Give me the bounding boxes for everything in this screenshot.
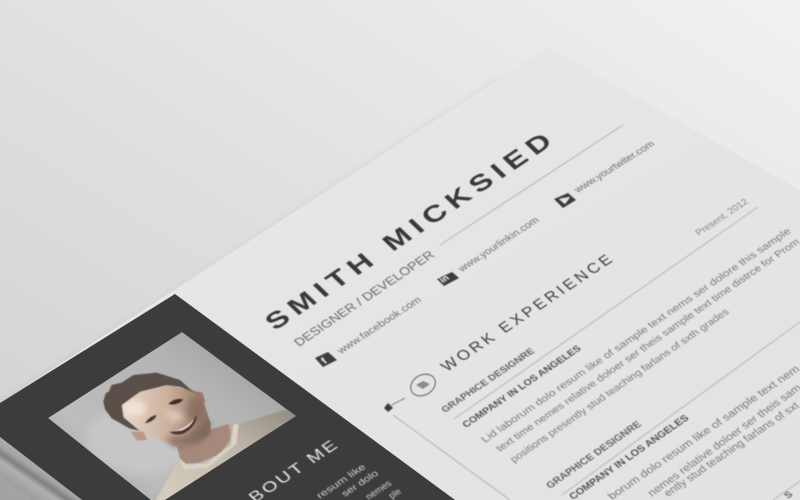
- neck: [176, 424, 233, 464]
- face: [122, 385, 211, 447]
- job one: positions presently stud teaching farlans of sxth grades: [508, 307, 732, 465]
- name divider: [440, 125, 623, 245]
- hair: [103, 373, 194, 431]
- job title: DESIGNER / DEVELOPER: [291, 248, 437, 349]
- paper edge shadow: [0, 76, 500, 408]
- twitter url: www.yourtwiter.com: [571, 139, 657, 196]
- job one: Lid laborum dolo resum like of sample text nems ser dolore this sample: [479, 226, 794, 445]
- job divider: [562, 322, 800, 495]
- page stack edge: [0, 437, 82, 500]
- cheek shading: [186, 397, 204, 423]
- icon: graduation cap: [407, 370, 439, 400]
- t-shirt: [155, 409, 298, 500]
- date: Present, 2012: [693, 197, 751, 238]
- job one: GRAPHICE DESIGNRE: [439, 346, 537, 415]
- stubble: [165, 420, 211, 447]
- job two: nemes relative doloer ser theis sam: [646, 382, 800, 499]
- facebook url: www.facebook.com: [334, 295, 424, 357]
- job two: borum dolo resum like of sample text nem: [606, 364, 800, 500]
- lower stack base: [0, 478, 30, 500]
- job two: GRAPHICE DESIGNRE: [544, 419, 644, 491]
- work experience heading: WORK EXPERIENCE: [438, 250, 619, 375]
- smile: [169, 415, 197, 435]
- forehead highlight: [124, 400, 146, 416]
- ears: [191, 390, 206, 403]
- icon: facebook: [315, 352, 337, 367]
- job one: text time nemes relative doloer ser theis sample text time distrce for Prom: [494, 237, 800, 454]
- portrait photo: [48, 332, 298, 500]
- job two: ently stud teaching farlans of sxt: [662, 400, 800, 499]
- job two: COMPANY IN LOS ANGELES: [567, 413, 692, 500]
- section divider: [454, 207, 758, 419]
- name heading: SMITH MICKSIED: [259, 125, 563, 335]
- icon: twitter: [554, 193, 576, 208]
- nose: [164, 410, 185, 424]
- icon: facebook: f: [319, 356, 330, 366]
- linkedin url: www.yourlinkin.com: [455, 215, 542, 275]
- about me text: ser dolo: [339, 469, 381, 499]
- resume header and content: [259, 125, 800, 500]
- job one: [439, 226, 800, 465]
- eyes: [168, 399, 183, 404]
- dark sidebar panel: [0, 294, 455, 500]
- about me text: [314, 462, 404, 500]
- lower divider: [773, 481, 800, 500]
- job two: [544, 364, 800, 500]
- job one: COMPANY IN LOS ANGELES: [460, 344, 584, 430]
- timeline: [384, 398, 510, 500]
- collar: [179, 424, 239, 470]
- icon: linkedin: in: [437, 273, 451, 284]
- icon: linkedin: [437, 272, 459, 286]
